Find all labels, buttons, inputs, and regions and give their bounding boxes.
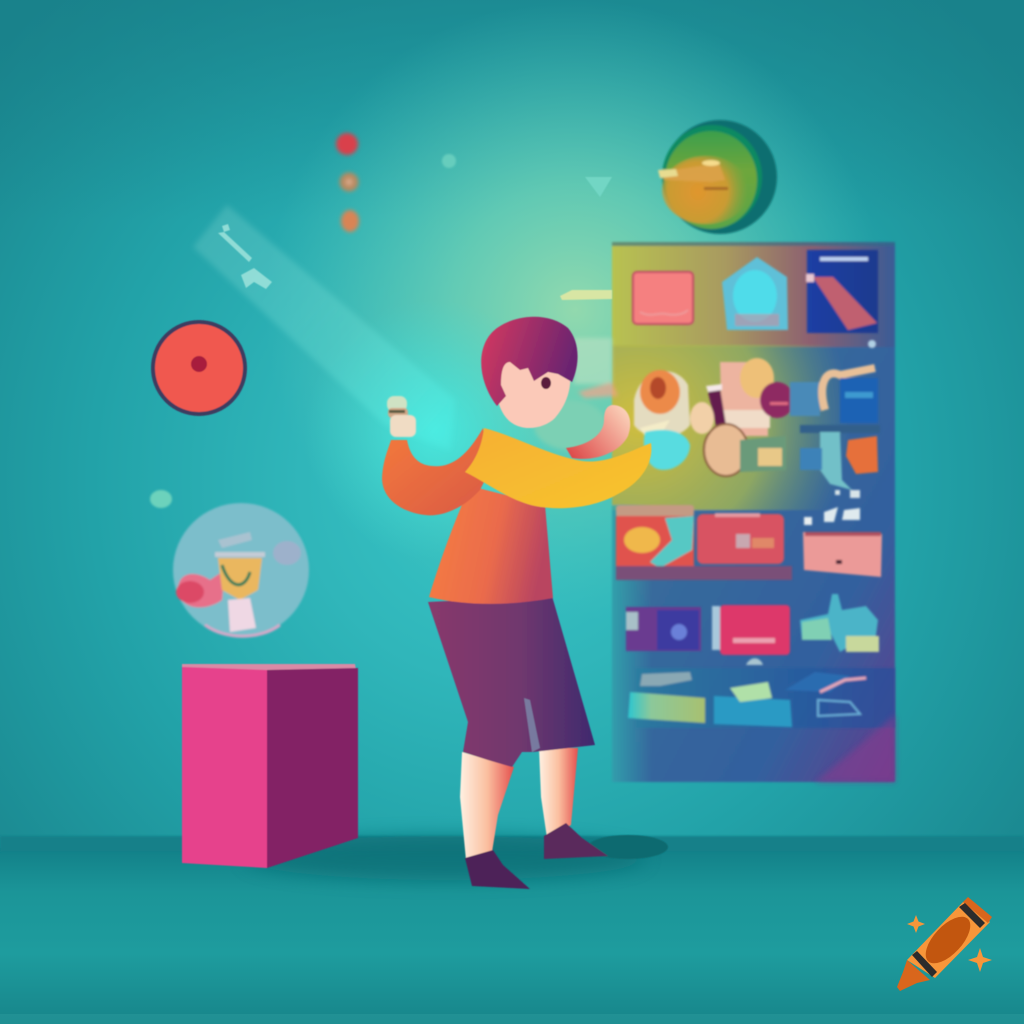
right leg xyxy=(539,748,578,838)
top row cards xyxy=(633,250,878,348)
three red dots xyxy=(336,133,359,232)
near arm xyxy=(382,428,490,515)
globe bubble xyxy=(173,503,309,637)
glowing screen near the face xyxy=(534,338,618,450)
boy figure xyxy=(382,317,668,889)
crayon logo xyxy=(897,897,992,991)
sparkle small xyxy=(907,915,925,933)
face xyxy=(494,351,570,428)
sparkle large xyxy=(968,948,992,972)
far arm xyxy=(566,405,630,459)
green and orange circle xyxy=(658,120,777,234)
small pale oval xyxy=(150,490,172,508)
pale dash beside panel xyxy=(560,290,612,300)
floor shadow xyxy=(245,836,645,880)
bottom row xyxy=(628,668,895,782)
fourth row cards xyxy=(626,594,879,665)
translucent light beam from the hand xyxy=(193,205,455,450)
hair xyxy=(481,317,578,406)
red circle xyxy=(153,322,245,414)
crayon tip xyxy=(897,960,930,991)
crayon bands xyxy=(912,903,985,977)
torso xyxy=(429,486,553,604)
crayon cap xyxy=(963,897,992,923)
left shoe xyxy=(465,850,530,889)
second row food and objects xyxy=(634,358,880,498)
beam marks xyxy=(218,224,272,289)
floor xyxy=(0,836,1024,1024)
right shoe xyxy=(544,823,668,859)
floating panel xyxy=(612,242,895,782)
crayon body xyxy=(907,902,990,978)
panel background xyxy=(612,242,895,782)
third row cards xyxy=(616,505,882,580)
eye xyxy=(541,377,551,389)
hand xyxy=(387,396,416,437)
left leg xyxy=(460,752,514,860)
crayon label xyxy=(918,909,978,971)
small teal dot xyxy=(442,154,456,168)
yellow scarf xyxy=(465,428,651,508)
pink box xyxy=(182,664,358,868)
small triangle xyxy=(585,177,612,197)
shorts xyxy=(428,596,595,767)
